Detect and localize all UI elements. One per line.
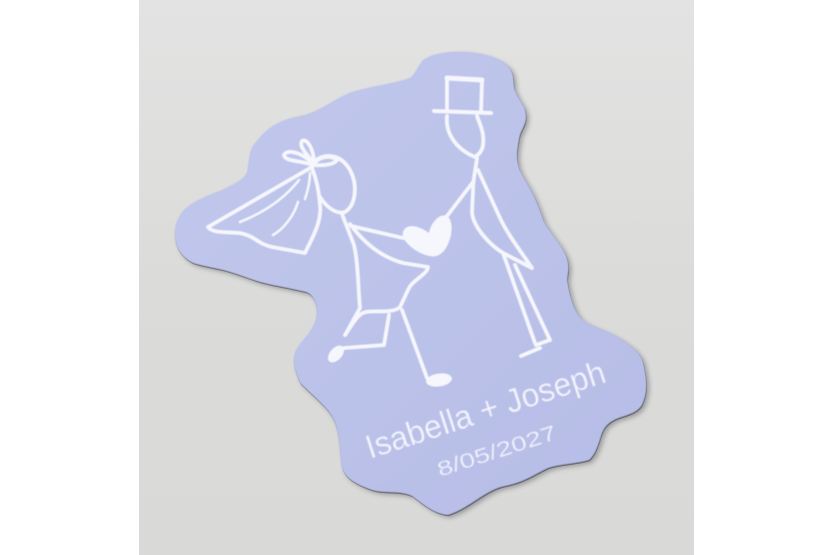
magnet soft shadow (178, 55, 649, 518)
groom figure (434, 78, 550, 356)
illustration: stick figure couple (208, 78, 550, 388)
bride feet (325, 343, 453, 388)
magnet dark edge (175, 53, 647, 516)
bride figure (208, 140, 453, 388)
grey photo background (139, 0, 694, 555)
date text: 8/05/2027 (434, 422, 559, 482)
names text: Isabella + Joseph (361, 353, 610, 466)
lavender magnet shape (175, 52, 646, 515)
heart held between the couple (403, 215, 452, 256)
